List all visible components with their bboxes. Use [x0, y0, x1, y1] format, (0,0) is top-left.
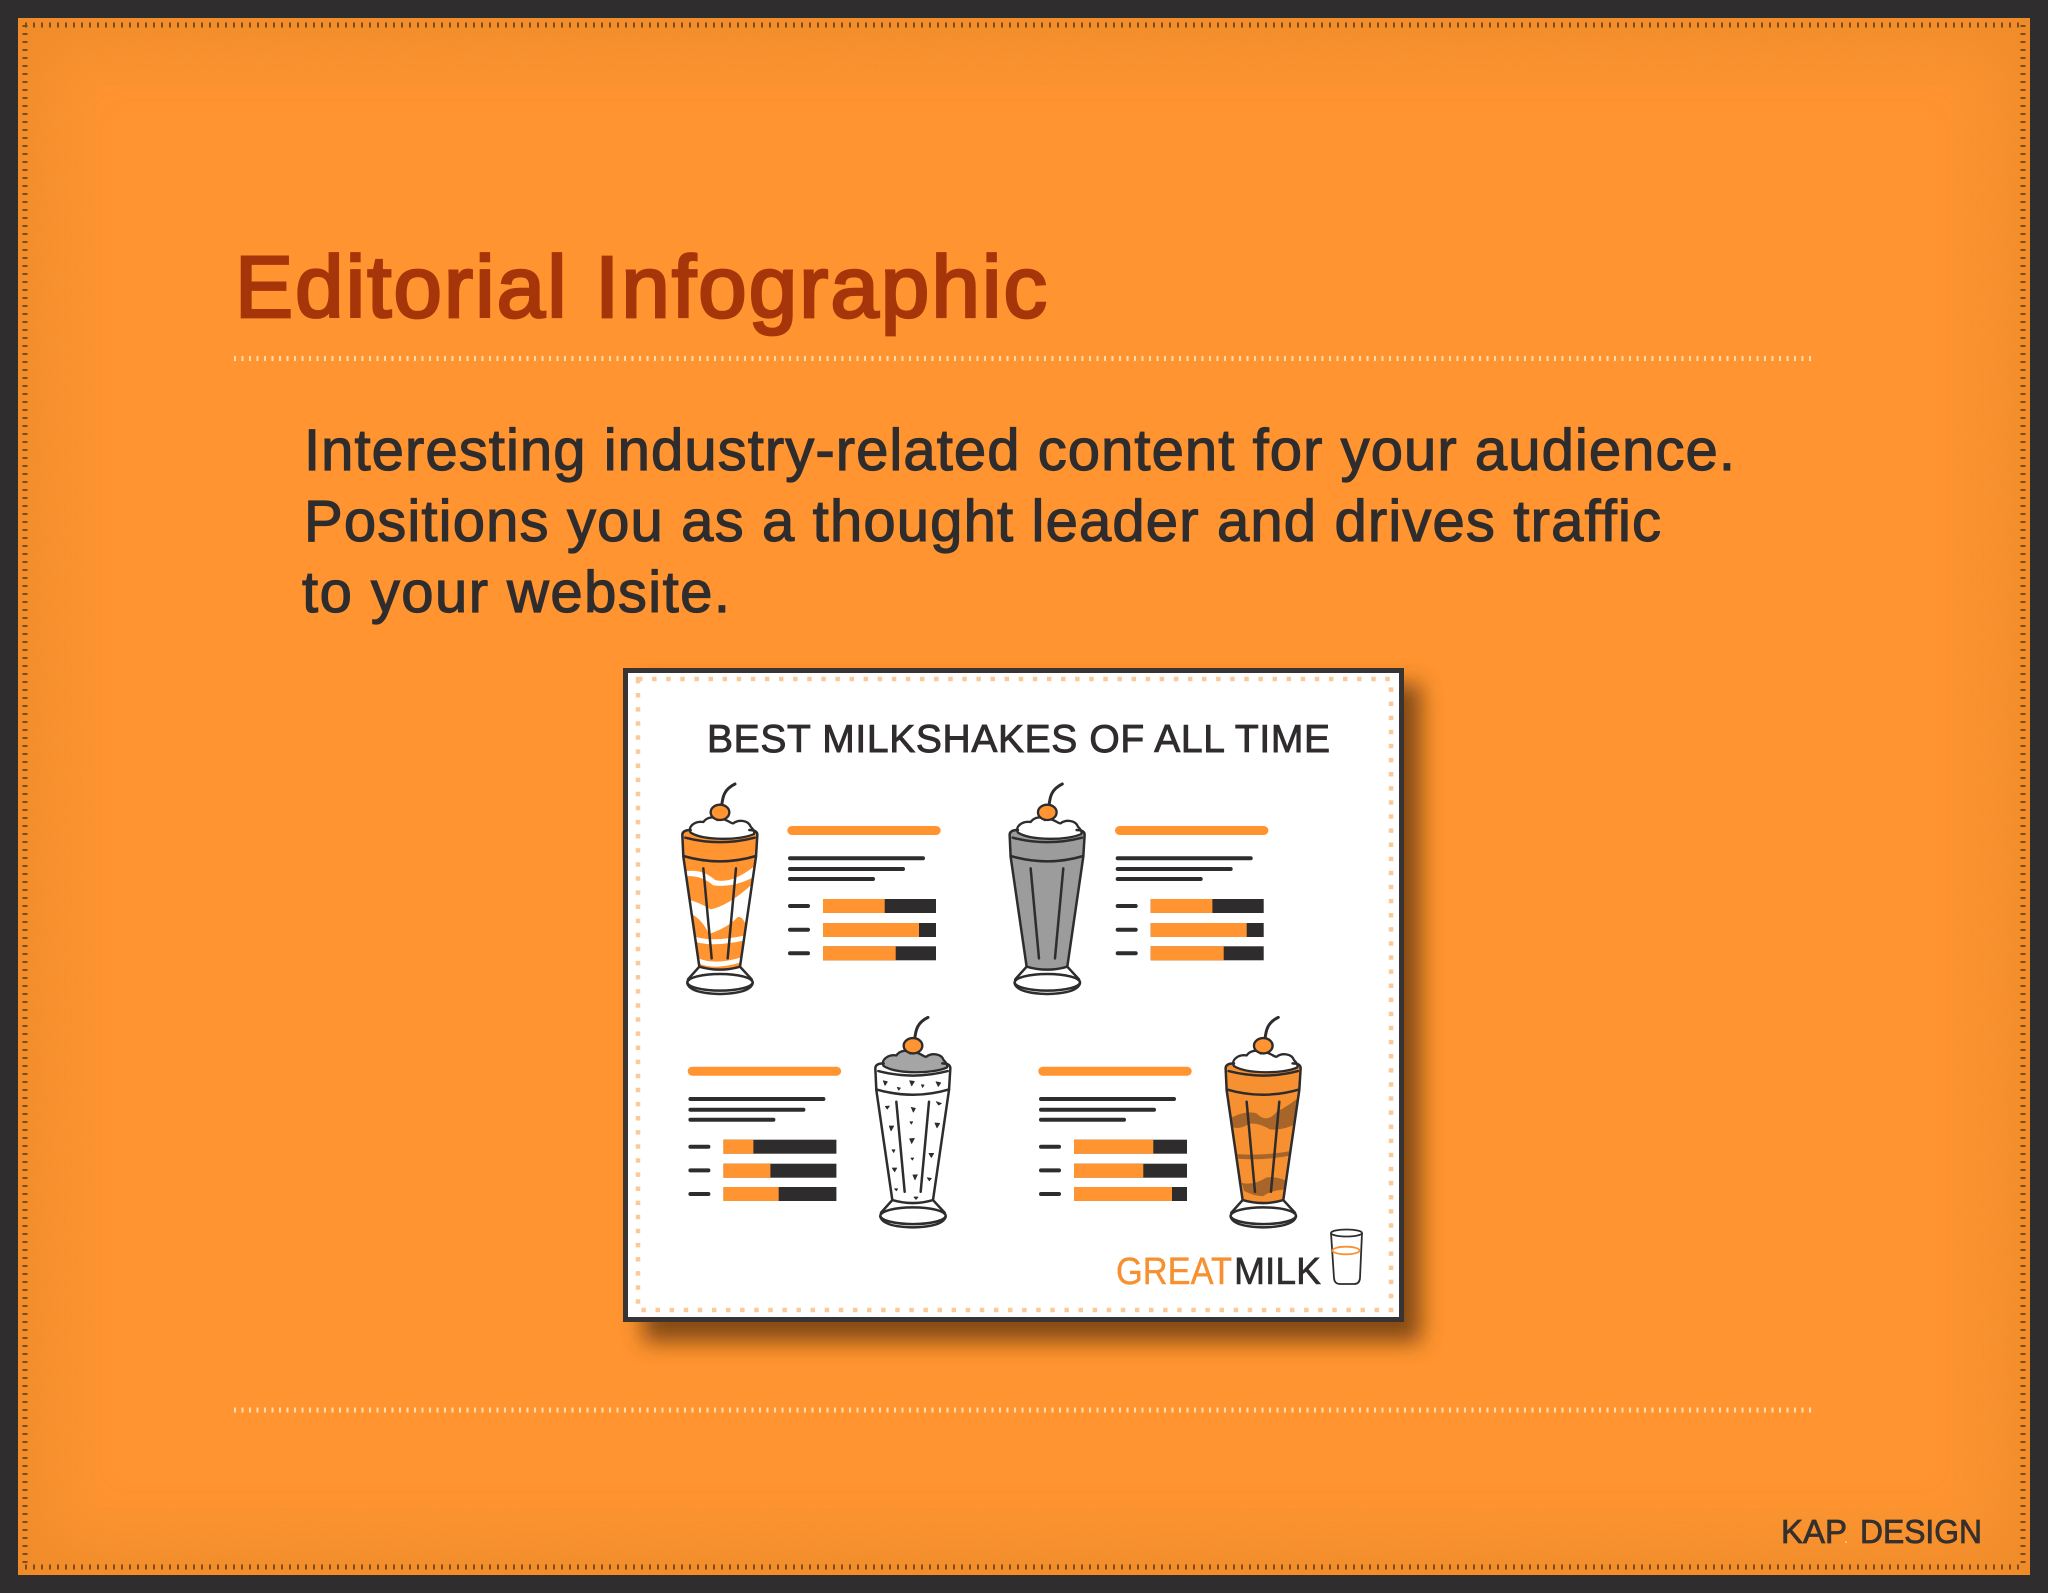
card shadow: [643, 684, 1421, 1342]
text block 1 with bars: [787, 826, 941, 960]
text block 2 with bars: [1115, 826, 1268, 960]
body text: Positions you as a thought leader and drives traffic: [304, 489, 1661, 554]
body text: [302, 418, 1735, 625]
text block 4 with bars: [1038, 1067, 1192, 1201]
logo: GreatMilk: MILK: [1234, 1251, 1321, 1293]
card background: [626, 670, 1402, 1320]
footer brand: KAP: [1781, 1513, 1847, 1550]
icon: milkshake speckled: [875, 1017, 950, 1227]
divider dotted line: bottom: [234, 1408, 1812, 1412]
card dotted inner border: [638, 679, 1391, 1310]
body text: Interesting industry-related content for your audience.: [304, 418, 1735, 483]
divider dotted line: top: [234, 356, 1812, 361]
icon: milkshake orange with caramel: [1226, 1017, 1302, 1227]
logo: GreatMilk: GREAT: [1116, 1251, 1232, 1293]
icon: milkshake orange swirl: [680, 784, 760, 994]
text block 3 with bars: [688, 1067, 841, 1201]
panel: milkshake editorial infographic card: [626, 670, 1421, 1342]
footer brand: DESIGN: [1860, 1513, 1982, 1550]
footer brand: .: [1844, 1530, 1848, 1546]
title: Editorial Infographic: [235, 239, 1047, 336]
logo: GreatMilk: [1116, 1230, 1362, 1293]
body text: to your website.: [302, 560, 730, 625]
icon: milkshake grey: [1010, 784, 1085, 994]
icon: glass of milk: [1331, 1230, 1362, 1284]
card title: BEST MILKSHAKES OF ALL TIME: [707, 718, 1330, 761]
